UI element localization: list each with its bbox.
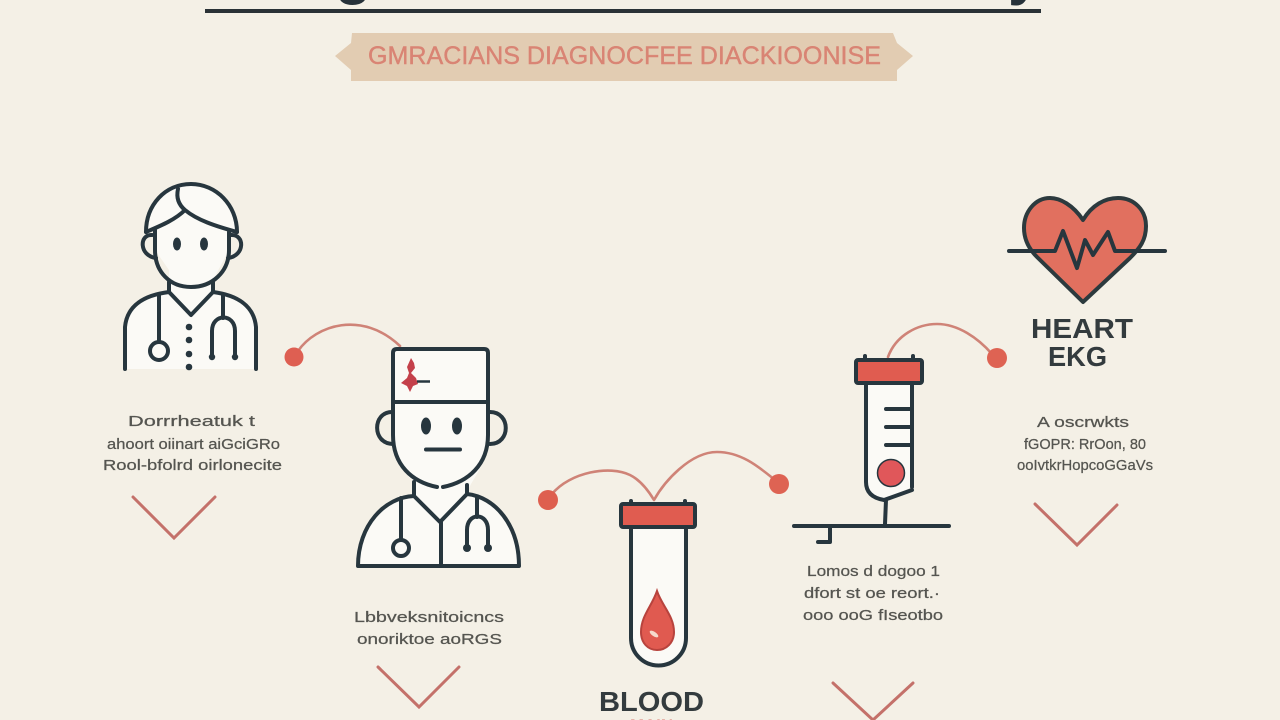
connector arc: doctor to surgeon	[284, 325, 400, 366]
text block: doctor description: Dorrrheatuk t	[128, 413, 256, 430]
icon: heart with EKG	[1009, 198, 1165, 302]
arrow: surgeon chevron	[378, 667, 459, 707]
text block: heart description	[1017, 414, 1153, 474]
text block: syringe description	[803, 563, 943, 624]
heading: blood: BLOOD	[599, 686, 704, 717]
icon: surgeon with cap	[358, 349, 519, 567]
icon: blood drop	[641, 591, 674, 650]
subtitle banner: GMRACIANS DIAGNOCFEE DIACKIOONISE	[368, 42, 881, 70]
text block: heart description: fGOPR: RrOon, 80	[1024, 436, 1146, 453]
arrow: doctor chevron	[133, 497, 215, 538]
text block: doctor description	[103, 413, 282, 474]
arrow: heart chevron	[1035, 504, 1117, 545]
connector arcs: blood test	[538, 452, 789, 510]
icon: doctor with stethoscope	[125, 184, 256, 370]
icon: syringe test tube	[794, 356, 949, 542]
title	[205, 0, 1042, 13]
text block: syringe description: Lomos d dogoo 1	[807, 563, 940, 580]
icon: blood test tube	[621, 501, 695, 665]
text block: doctor description: Rool-bfolrd oirlonecite	[103, 457, 282, 474]
text block: surgeon description: Lbbveksnitoicncs	[354, 609, 504, 626]
text block: doctor description: ahoort oiinart aiGciGRo	[107, 436, 280, 453]
text block: syringe description: ooo ooG fIseotbo	[803, 607, 943, 624]
text block: surgeon description	[354, 609, 504, 648]
heading: heart EKG: EKG	[1048, 341, 1107, 372]
subtitle banner	[335, 33, 913, 81]
connector arc: syringe to heart	[888, 324, 1007, 368]
text block: surgeon description: onoriktoe aoRGS	[357, 631, 502, 648]
text block: heart description: ooIvtkrHopcoGGaVs	[1017, 457, 1153, 474]
heading: heart EKG	[1031, 313, 1133, 372]
text block: heart description: A oscrwkts	[1037, 414, 1129, 431]
heading: heart EKG: HEART	[1031, 313, 1133, 344]
text block: syringe description: dfort st oe reort.·	[804, 585, 940, 602]
arrow: syringe chevron	[833, 683, 913, 720]
